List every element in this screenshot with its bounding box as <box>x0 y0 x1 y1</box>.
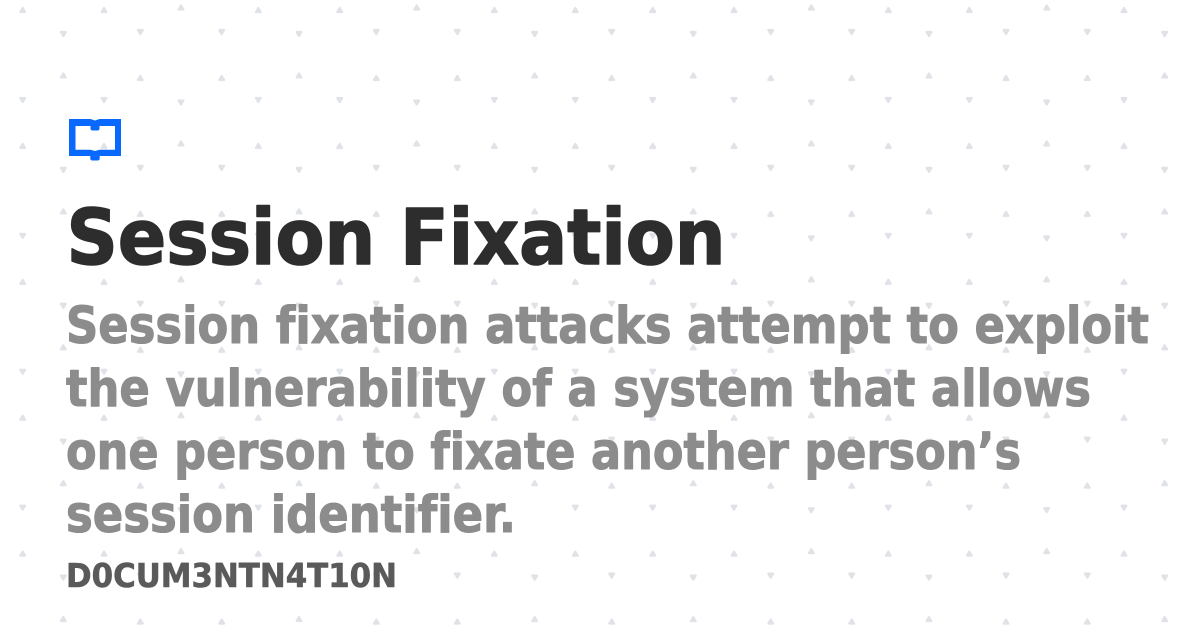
title: Session Fixation <box>66 194 726 283</box>
description text block: the vulnerability of a system that allows <box>66 360 1091 419</box>
icon: open book <box>69 119 121 160</box>
description text block <box>66 297 1149 545</box>
description text block: session identifier. <box>66 486 516 545</box>
footer brand name: D0CUM3NTN4T10N <box>66 557 397 595</box>
description text block: one person to fixate another person’s <box>66 423 1021 482</box>
